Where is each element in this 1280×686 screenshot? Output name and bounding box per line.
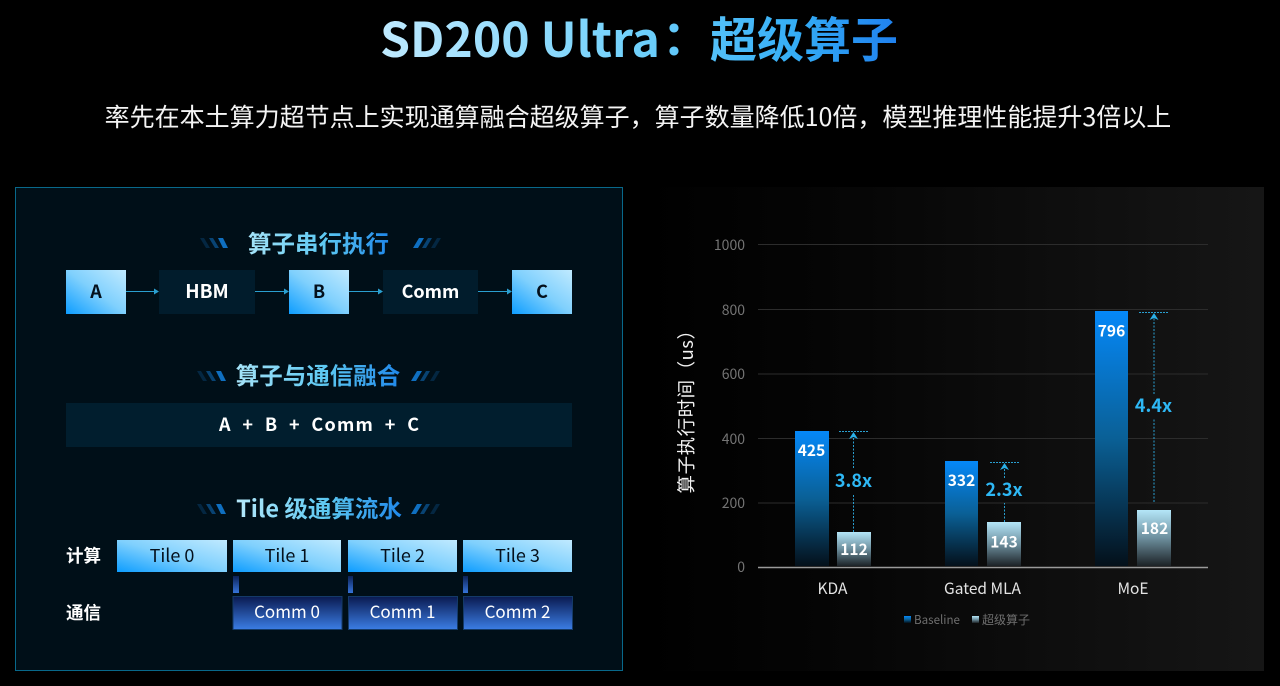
group: MoE bars	[1095, 311, 1172, 566]
x axis category labels: Gated MLA	[944, 577, 1022, 599]
legend	[904, 611, 1030, 628]
group: KDA bars	[795, 431, 872, 566]
row label: communication: 通信	[66, 600, 101, 625]
x axis baseline	[758, 566, 1208, 568]
box: A: A	[89, 278, 102, 304]
heading: serial execution	[200, 225, 441, 259]
heading: tile pipeline: Tile 级通算流水	[236, 490, 402, 524]
gridlines	[758, 244, 1208, 503]
compute tiles	[117, 540, 572, 572]
y axis tick labels: 600	[722, 364, 745, 384]
x axis category labels	[818, 577, 1149, 599]
bar: Gated MLA super operator 143: 143	[990, 530, 1018, 552]
tile 3	[463, 540, 572, 572]
bar: MoE super operator 182	[1137, 510, 1171, 566]
panel: operator execution diagrams	[16, 188, 622, 670]
comm 0	[233, 596, 342, 630]
arrow: A to HBM	[126, 288, 159, 294]
y axis title: 算子执行时间（us）	[673, 321, 699, 493]
panel: bar chart	[641, 187, 1264, 671]
annotation: 2.3x: 2.3x	[985, 476, 1023, 502]
serial flow row	[66, 270, 572, 314]
bar: MoE baseline 796	[1095, 311, 1128, 566]
title: SD200 Ultra	[380, 1, 660, 71]
tile 0: Tile 0	[150, 542, 194, 568]
comm 0: Comm 0	[254, 598, 320, 623]
communication tiles	[233, 596, 572, 630]
y axis tick labels: 400	[722, 429, 745, 449]
comm 2: Comm 2	[485, 598, 550, 623]
y axis tick labels: 800	[722, 300, 745, 320]
box: A	[66, 270, 126, 314]
tile 2	[348, 540, 457, 572]
comm 2	[464, 596, 572, 630]
heading: fusion: 算子与通信融合	[236, 357, 401, 391]
tile 0	[117, 540, 227, 572]
arrow: HBM to B	[255, 288, 289, 294]
x axis category labels: MoE	[1117, 577, 1149, 599]
merged operator bar	[66, 403, 572, 447]
box: C	[512, 270, 572, 314]
bar: KDA super operator 112: 112	[840, 538, 868, 560]
box: HBM: HBM	[185, 277, 229, 304]
box: B: B	[313, 278, 325, 304]
group: Gated MLA bars	[945, 461, 1023, 566]
tile 2: Tile 2	[380, 542, 425, 568]
box: Comm: Comm	[402, 278, 459, 304]
tile 1	[233, 540, 341, 572]
arrow: Comm to C	[478, 288, 512, 294]
bar: KDA baseline 425: 425	[798, 439, 825, 461]
legend item: Baseline: Baseline	[914, 611, 960, 628]
annotation: 3.8x: 3.8x	[835, 467, 872, 493]
tile 1: Tile 1	[265, 542, 309, 568]
heading: fusion	[197, 357, 440, 391]
legend item: super operator: 超级算子	[982, 611, 1030, 628]
title: ：	[650, 1, 698, 71]
row label: compute: 计算	[66, 543, 101, 568]
bar: Gated MLA baseline 332: 332	[948, 469, 975, 491]
box: B	[289, 270, 349, 314]
y axis tick labels: 0	[737, 557, 745, 577]
x axis category labels: KDA	[818, 577, 848, 599]
y axis tick labels: 200	[722, 493, 745, 513]
merged operator bar: A + B + Comm + C	[218, 411, 419, 437]
arrow: B to Comm	[349, 288, 383, 294]
subtitle: 率先在本土算力超节点上实现通算融合超级算子，算子数量降低10倍，模型推理性能提升3倍以上	[105, 98, 1171, 134]
title: 超级算子	[710, 1, 898, 71]
title	[380, 1, 898, 71]
heading: tile pipeline	[197, 490, 440, 524]
box: C: C	[536, 278, 548, 304]
connectors compute to communication	[233, 576, 468, 593]
box: HBM	[159, 270, 255, 314]
y axis tick labels	[714, 235, 745, 577]
comm 1: Comm 1	[370, 598, 435, 623]
comm 1	[348, 596, 458, 630]
annotation: 4.4x	[1135, 312, 1172, 502]
y axis tick labels: 1000	[714, 235, 745, 255]
bar: MoE super operator 182: 182	[1141, 517, 1168, 539]
box: Comm	[383, 270, 478, 314]
tile 3: Tile 3	[495, 542, 540, 568]
bar: MoE baseline 796: 796	[1098, 320, 1125, 342]
annotation: 4.4x: 4.4x	[1135, 392, 1172, 418]
heading: serial execution: 算子串行执行	[248, 225, 389, 259]
